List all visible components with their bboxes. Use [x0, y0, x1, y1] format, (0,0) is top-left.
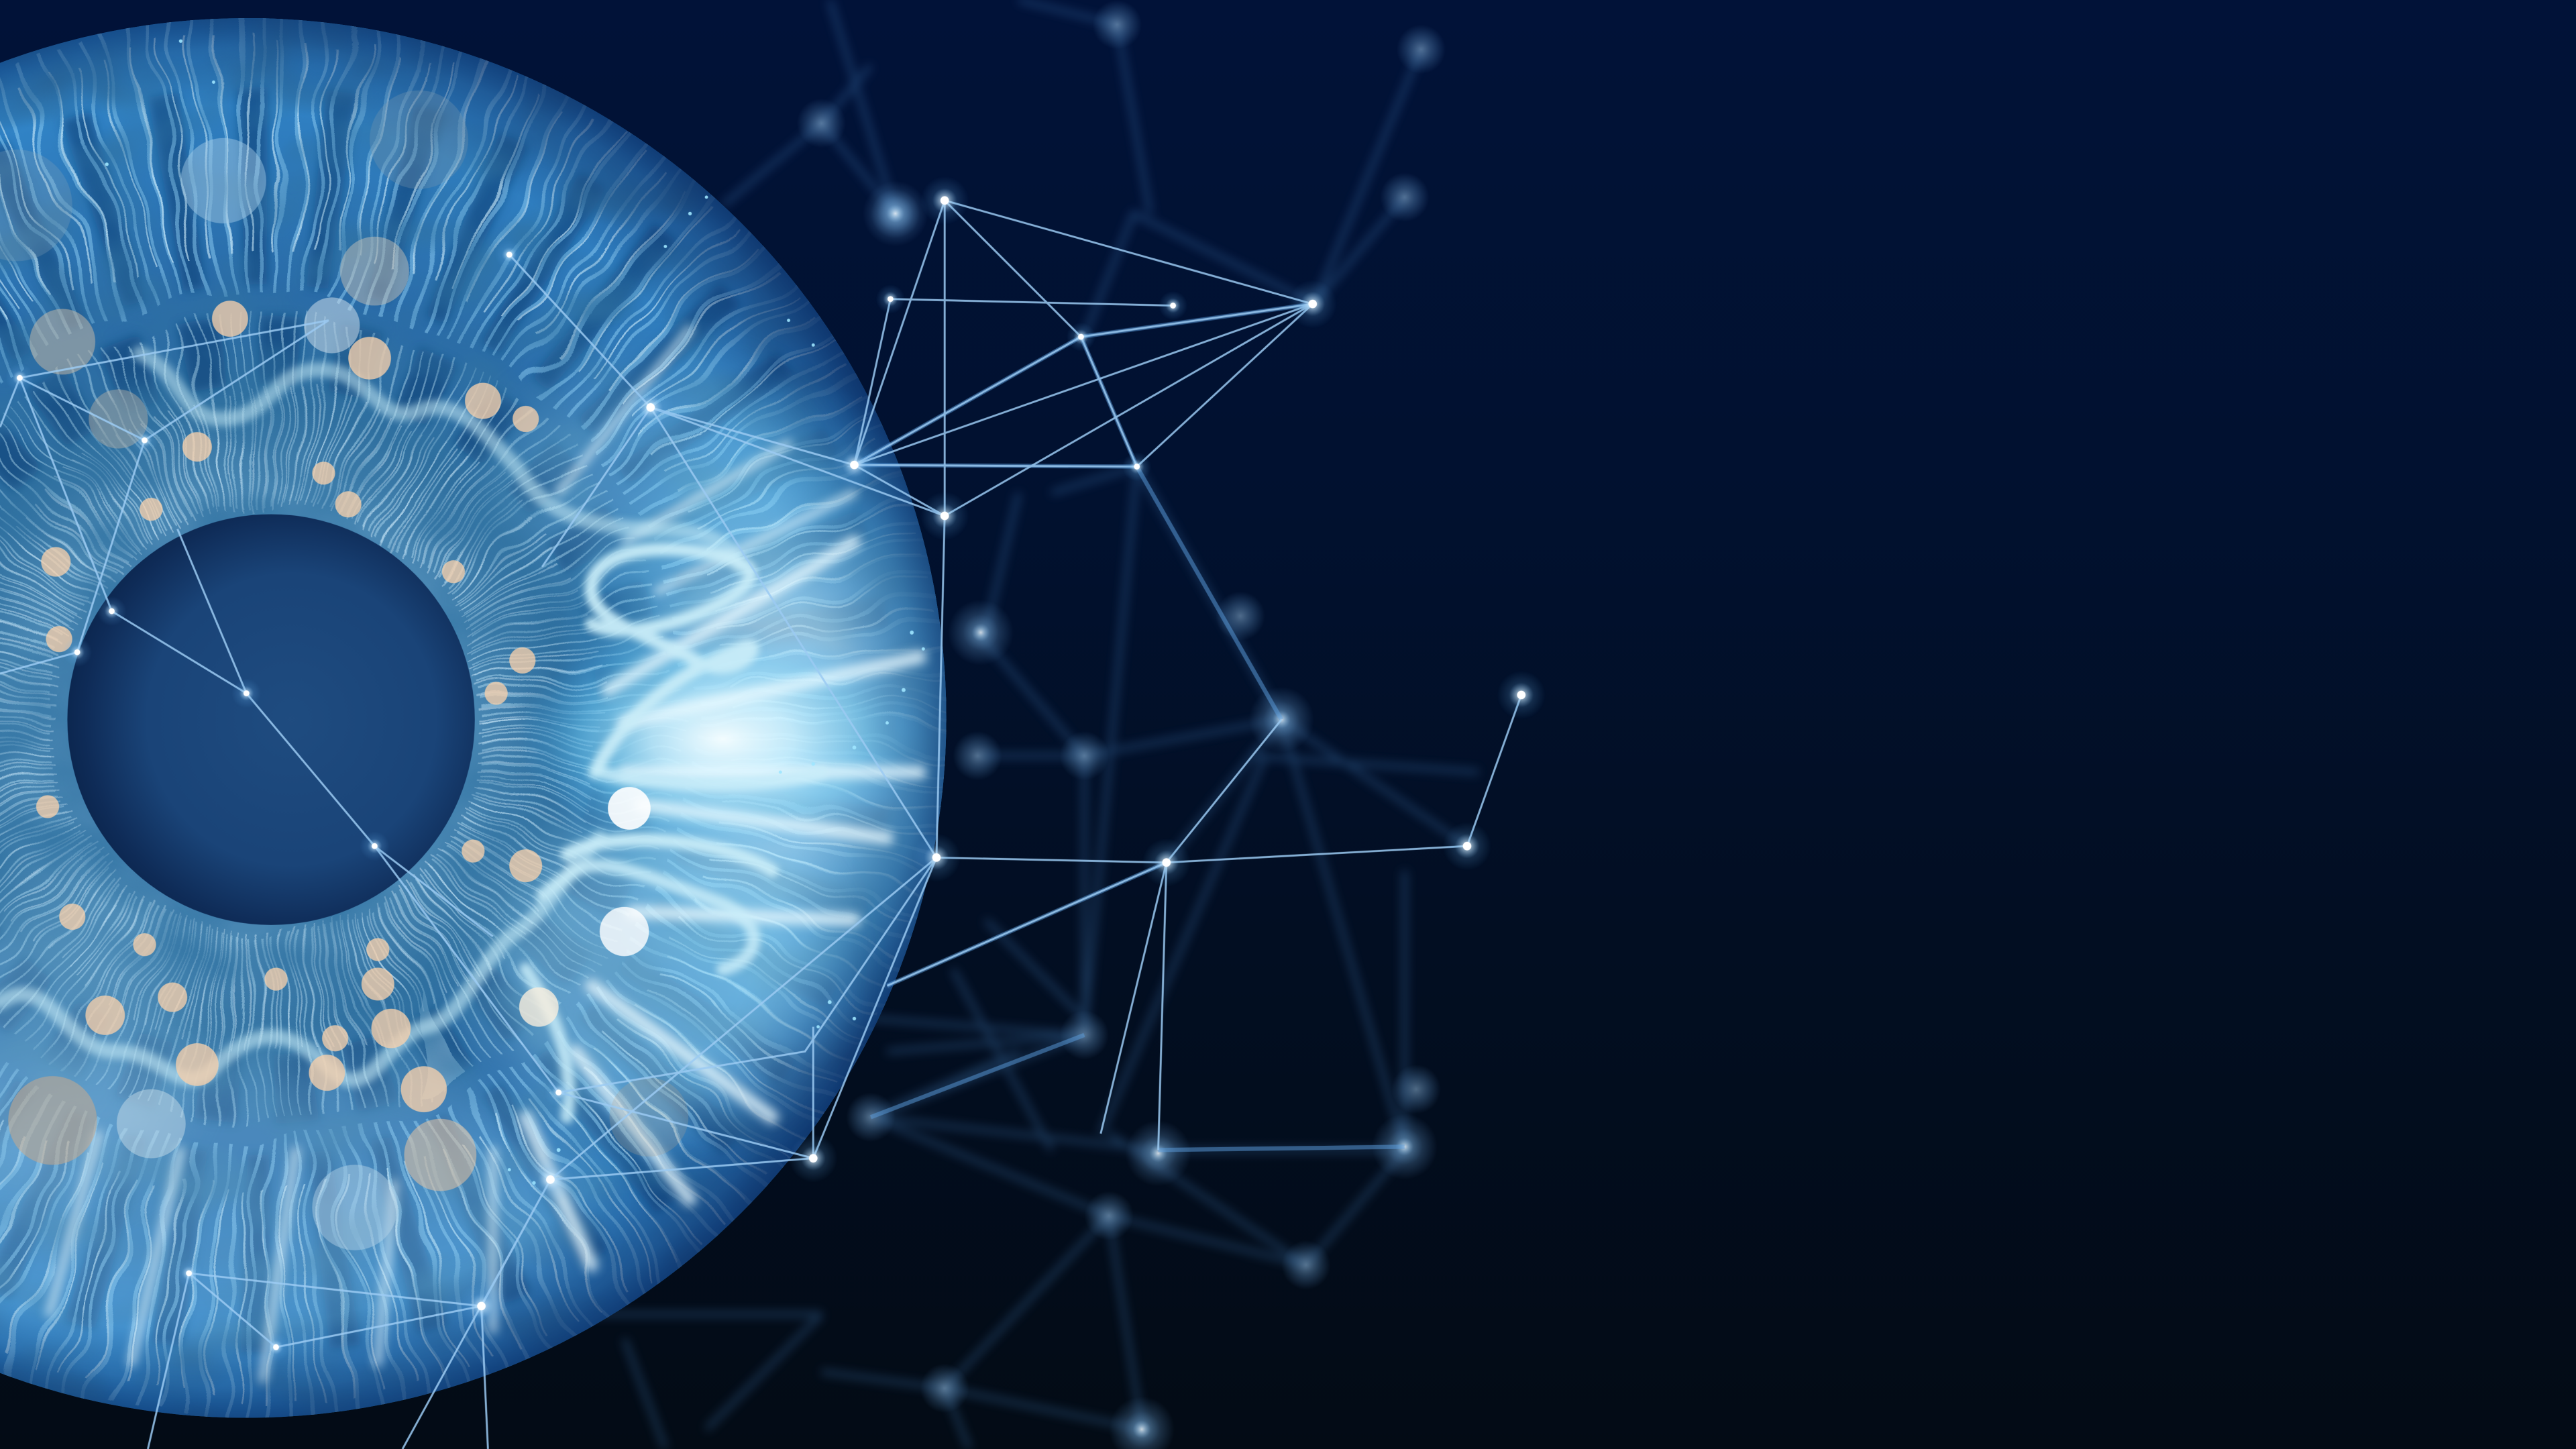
iris fibres: [0, 145, 838, 1295]
iris base: [0, 15, 950, 1421]
sparkle particles: [105, 40, 925, 1185]
bright flare on the right of the iris: [550, 370, 994, 1076]
iris dark folds: [0, 186, 797, 1254]
blurred background nodes: [797, 0, 1446, 1449]
orange bokeh dots: [36, 301, 542, 1112]
iris scalloped folds: [0, 354, 821, 1117]
flare rays: [49, 329, 920, 1380]
eye iris: [0, 0, 994, 1449]
pupil: [67, 515, 475, 925]
glowing thick network strands: [854, 304, 1405, 1150]
lower iris light wash: [0, 1051, 592, 1347]
blurred background network: [493, 0, 1479, 1449]
sharp network lines: [0, 201, 1521, 1449]
iris outer dark crescent: [0, 15, 950, 1421]
pale bokeh discs: [0, 91, 688, 1250]
sharp network nodes: [5, 176, 1546, 1362]
iris mottling: [0, 0, 953, 1449]
